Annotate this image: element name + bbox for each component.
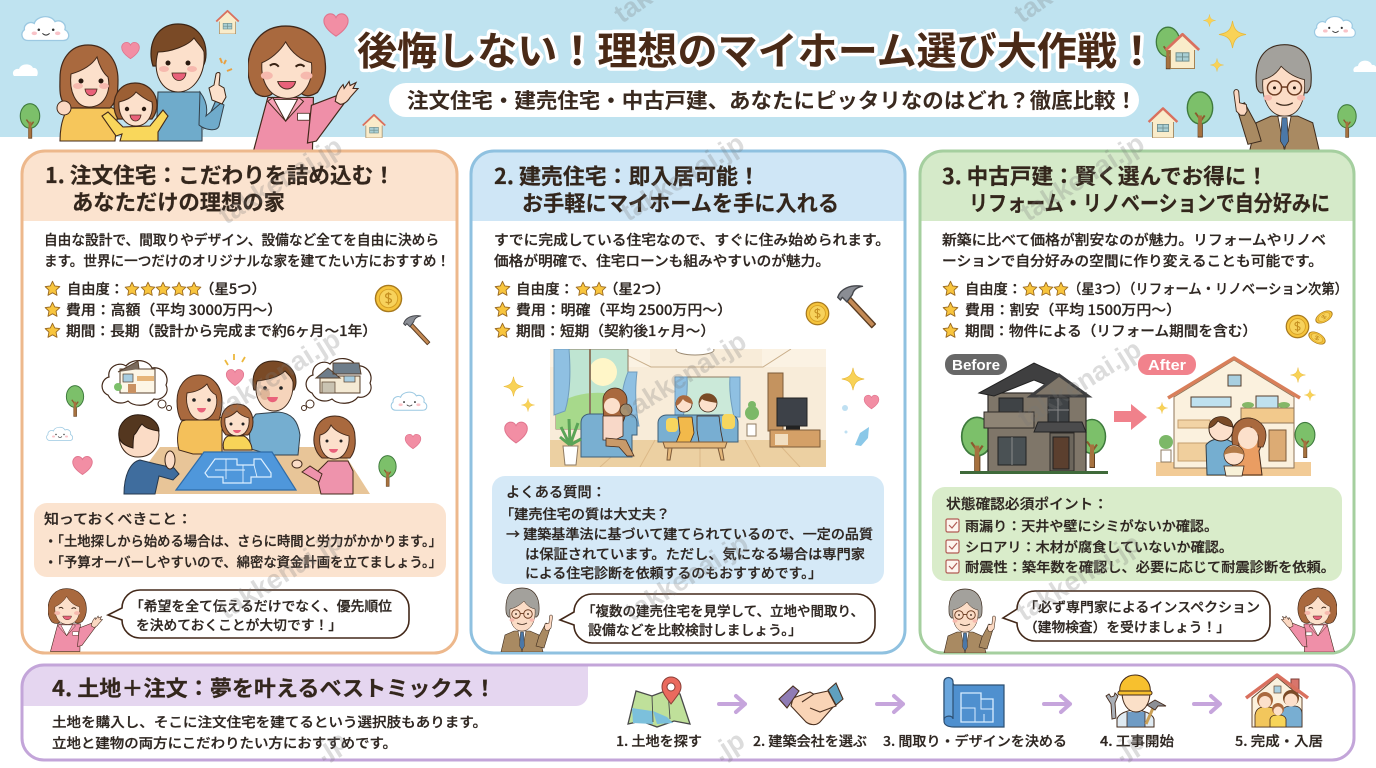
ratings list: 費用：高額（平均 3000万円～） — [66, 300, 282, 320]
plant — [1159, 435, 1173, 462]
arrow — [1194, 696, 1220, 712]
step 1: find land — [616, 677, 702, 750]
callout: things to know: ・「土地探しから始める場合は、さらに時間と労力がかかります。」 — [44, 530, 442, 550]
television — [770, 398, 820, 447]
callout: frequently asked question: よくある質問： — [506, 482, 606, 502]
illustration: before house — [960, 363, 1108, 474]
mother — [57, 45, 118, 141]
right sofa and family — [658, 393, 738, 443]
callout: frequently asked question: 「建売住宅の質は大丈夫？ — [500, 503, 670, 523]
description — [494, 230, 890, 271]
child — [102, 83, 168, 141]
description — [942, 230, 1326, 271]
watermarks: takkenai.jp — [1011, 528, 1146, 627]
speech bubble — [108, 590, 409, 638]
icon: coin — [806, 302, 829, 325]
panel: 2 ready-built house — [471, 151, 905, 653]
ratings list — [495, 279, 732, 341]
description: すでに完成している住宅なので、すぐに住み始められます。 — [494, 230, 890, 250]
icon: small cloud — [1353, 61, 1376, 72]
watermarks — [211, 0, 1150, 767]
speech bubble: を決めておくことが大切です！」 — [136, 614, 342, 634]
step 2: choose builder: 2. 建築会社を選ぶ — [753, 730, 868, 750]
heading: リフォーム・リノベーションで自分好みに — [969, 187, 1330, 218]
header illustration: right adviser and houses — [1149, 14, 1376, 151]
description: ます。世界に一つだけのオリジナルな家を建てたい方におすすめ！ — [44, 251, 450, 271]
speech bubble — [1003, 591, 1270, 641]
illustration: living room — [550, 345, 826, 467]
icon: house right — [1149, 108, 1177, 138]
ratings list: （星5つ） — [200, 279, 266, 299]
ratings list: 期間：物件による（リフォーム期間を含む） — [965, 321, 1257, 341]
icon: sparkles — [1203, 14, 1246, 72]
icon: house top — [216, 11, 239, 34]
icon: heart — [122, 42, 139, 59]
senior adviser — [1234, 45, 1319, 151]
title: 後悔しない！理想のマイホーム選び大作戦！ — [357, 21, 1157, 77]
ratings list: 自由度： — [965, 279, 1022, 299]
family — [1206, 417, 1266, 476]
table — [125, 447, 370, 494]
badge: before: Before — [952, 357, 1000, 374]
callout: things to know: 知っておくべきこと： — [44, 509, 192, 529]
description: 価格が明確で、住宅ローンも組みやすいのが魅力。 — [494, 251, 830, 271]
illustration: after house — [1156, 358, 1316, 476]
ratings list: 費用：明確（平均 2500万円～） — [516, 300, 732, 320]
icon: small white cloud — [13, 64, 38, 76]
icon: construction worker — [1106, 675, 1166, 727]
watermarks: .jp — [1107, 725, 1150, 767]
step 4: construction — [1100, 675, 1175, 750]
header illustration: left family and adviser — [13, 11, 385, 153]
ratings list: 自由度： — [67, 279, 124, 299]
badge: after: After — [1148, 357, 1186, 374]
watermarks: takkenai.jp — [619, 528, 754, 627]
speech bubble: 設備などを比較検討しましょう。」 — [588, 619, 802, 639]
icon: house and tree — [1156, 27, 1199, 69]
ratings list: 自由度： — [516, 279, 574, 299]
adviser woman large — [248, 26, 358, 153]
sparkles — [1156, 368, 1316, 414]
illustration: family planning with adviser — [47, 354, 427, 494]
icon: handshake — [779, 683, 843, 725]
panel: 3 pre-owned house — [920, 151, 1354, 653]
arrow — [877, 696, 903, 712]
ratings list: 期間：長期（設計から完成まで約6ヶ月～1年） — [66, 321, 377, 341]
description: 土地を購入し、そこに注文住宅を建てるという選択肢もあります。 — [52, 711, 487, 731]
step 3: floor plan: 3. 間取り・デザインを決める — [883, 730, 1067, 750]
step 1: find land: 1. 土地を探す — [616, 730, 702, 750]
callout: inspection checklist: 雨漏り：天井や壁にシミがないか確認。 — [965, 515, 1218, 535]
arrow — [1044, 696, 1070, 712]
icon: tree right — [1187, 92, 1213, 137]
icon: cloud — [1315, 16, 1355, 37]
callout: inspection checklist: 状態確認必須ポイント： — [946, 494, 1108, 514]
callout: frequently asked question: による住宅診断を依頼するのもおすすめです。」 — [525, 562, 822, 582]
watermarks: takkenai.jp — [1015, 128, 1150, 227]
icon: sparkles and hearts around room — [504, 368, 879, 446]
description: 立地と建物の両方にこだわりたい方におすすめです。 — [52, 732, 397, 752]
icon: house small — [363, 115, 385, 138]
speech bubble: 「複数の建売住宅を見学して、立地や間取り、 — [582, 600, 864, 620]
watermarks: takkenai.jp — [213, 526, 348, 625]
ratings list — [943, 279, 1348, 341]
speech bubble: （建物検査）を受けましょう！」 — [1024, 616, 1230, 636]
father — [151, 24, 232, 141]
callout: frequently asked question: は保証されています。ただし、気になる場合は専門家 — [525, 543, 865, 563]
thought bubble: house right — [302, 359, 371, 410]
plant — [560, 419, 581, 465]
watermarks: takkenai.jp — [617, 326, 752, 425]
callout: inspection checklist: 耐震性：築年数を確認し、必要に応じて耐震診断を依頼。 — [965, 556, 1335, 576]
heading — [494, 160, 839, 218]
description — [52, 711, 487, 752]
subtitle pill: 注文住宅・建売住宅・中古戸建、あなたにピッタリなのはどれ？徹底比較！ — [407, 85, 1137, 115]
icon: hammer — [838, 286, 875, 328]
icon: smiling cloud — [22, 17, 69, 40]
heading: 4. 土地＋注文：夢を叶えるベストミックス！ — [52, 672, 496, 703]
father — [250, 361, 300, 455]
callout: things to know: ・「予算オーバーしやすいので、綿密な資金計画を立てましょう。」 — [44, 551, 442, 571]
icon: tree left — [66, 386, 84, 416]
badge: after — [1138, 354, 1196, 375]
heading: 2. 建売住宅：即入居可能！ — [494, 160, 760, 191]
arrow: before to after — [1114, 404, 1147, 430]
watermarks: takkenai.jp — [615, 128, 750, 227]
heading: お手軽にマイホームを手に入れる — [522, 187, 839, 218]
thought bubble: house left — [102, 361, 172, 410]
ratings list: （星3つ）（リフォーム・リノベーション次第） — [1068, 279, 1348, 299]
small plant — [745, 401, 759, 436]
ratings list: 費用：割安（平均 1500万円～） — [965, 300, 1181, 320]
adviser avatar — [48, 589, 103, 651]
table — [663, 442, 727, 460]
adviser — [292, 416, 355, 494]
icon: coin — [375, 285, 402, 312]
icon: heart large — [324, 14, 348, 36]
panel: 1 custom-built house — [22, 151, 457, 653]
arrow — [719, 696, 745, 712]
header banner background — [0, 0, 1376, 137]
watermarks: takkenai.jp — [213, 131, 348, 230]
icon: blueprint — [944, 678, 1004, 727]
mother — [177, 375, 222, 454]
icon: map with pin — [628, 677, 690, 727]
watermarks: takkenai.jp — [1012, 334, 1147, 433]
heading: あなただけの理想の家 — [72, 186, 285, 217]
blueprint — [176, 452, 296, 490]
icon: house with family — [1246, 675, 1308, 727]
callout: inspection checklist — [932, 487, 1342, 581]
ratings list: （星2つ） — [604, 279, 670, 299]
adviser avatar — [1282, 588, 1337, 652]
callout: inspection checklist: シロアリ：木材が腐食していないか確認。 — [965, 536, 1233, 556]
icon: tree far right — [1338, 105, 1356, 137]
description: 新築に比べて価格が割安なのが魅力。リフォームやリノベ — [942, 230, 1326, 250]
heading: 1. 注文住宅：こだわりを詰め込む！ — [45, 159, 395, 190]
watermarks: .jp — [707, 725, 750, 767]
icon: tree right — [379, 456, 396, 486]
heading — [45, 159, 395, 217]
watermarks: .jp — [309, 725, 352, 767]
description — [44, 230, 450, 271]
child — [221, 404, 253, 450]
speech bubble: 「必ず専門家によるインスペクション — [1024, 596, 1260, 616]
step 3: floor plan — [883, 678, 1067, 750]
ratings list — [45, 279, 377, 341]
watermarks: takkenai.jp — [211, 324, 346, 423]
senior adviser avatar — [501, 588, 552, 652]
senior adviser avatar — [944, 589, 996, 653]
icon: cloud left — [47, 427, 73, 440]
callout: frequently asked question — [492, 476, 884, 584]
step 5: move in — [1235, 675, 1323, 750]
callout: things to know — [34, 503, 446, 577]
icon: coins — [1286, 308, 1334, 347]
badge: before — [945, 354, 1007, 375]
step 2: choose builder — [753, 683, 868, 750]
speech bubble — [560, 594, 875, 643]
heading: 3. 中古戸建：賢く選んでお得に！ — [942, 160, 1268, 191]
ratings list: 期間：短期（契約後1ヶ月～） — [516, 321, 715, 341]
step 4: construction: 4. 工事開始 — [1100, 730, 1175, 750]
icon: hearts — [73, 354, 421, 474]
speech bubble: 「希望を全て伝えるだけでなく、優先順位 — [130, 595, 392, 615]
step 5: move in: 5. 完成・入居 — [1235, 730, 1323, 750]
heading — [942, 160, 1330, 218]
callout: frequently asked question: → 建築基準法に基づいて建てられているので、一定の品質 — [506, 523, 873, 543]
left sofa and mother — [581, 388, 637, 457]
description: ーションで自分好みの空間に作り変えることも可能です。 — [942, 251, 1323, 271]
panel: 4 land and custom-built — [22, 665, 1354, 760]
icon: hammer — [404, 316, 430, 345]
description: 自由な設計で、間取りやデザイン、設備など全てを自由に決めら — [44, 230, 439, 250]
icon: checkbox — [946, 519, 959, 573]
client — [119, 415, 179, 494]
icon: cloud right — [391, 392, 427, 410]
icon: tree — [20, 104, 40, 138]
